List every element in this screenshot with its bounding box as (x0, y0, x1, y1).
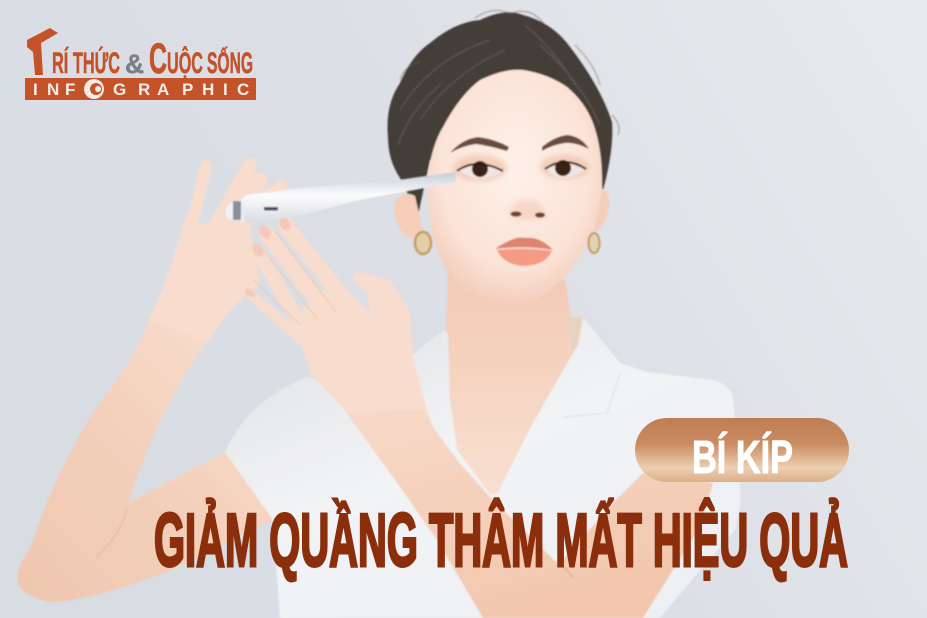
logo text: uộc: UỘC (167, 46, 203, 80)
upper lash (457, 164, 503, 171)
photo: woman with eye massage pen (17, 10, 741, 618)
ears (394, 189, 609, 240)
neck and chest (446, 265, 577, 495)
nose shadow (508, 200, 548, 220)
lips (495, 237, 553, 266)
right ear (594, 189, 609, 232)
left nostril (510, 211, 522, 217)
logo ampersand: & (125, 49, 144, 79)
left ear (394, 194, 425, 240)
left earring (415, 232, 431, 254)
iris (472, 161, 488, 177)
nose (508, 200, 548, 220)
upper lip (495, 237, 553, 250)
logo disc icon (84, 79, 104, 99)
pen brand mark (264, 207, 278, 210)
right eye (540, 155, 590, 179)
eye white (546, 164, 585, 178)
finger nails (243, 215, 293, 299)
hair mass (388, 12, 612, 215)
lower lip (497, 249, 552, 266)
right forearm and upper arm (330, 375, 713, 618)
right earring (588, 233, 600, 253)
face (428, 70, 602, 303)
logo text: Trí thức: RÍ THỨC (52, 46, 120, 80)
right hand (243, 215, 427, 412)
eyeshadow (453, 155, 507, 181)
finger creases (254, 232, 336, 325)
badge (635, 418, 849, 483)
logo: Tri Thuc & Cuoc Song Infographic (25, 28, 256, 100)
elbow crease (97, 510, 127, 557)
lapel crease (563, 373, 620, 417)
iris (555, 160, 571, 176)
logo bar text: INFOGRAPHIC (33, 80, 249, 99)
pen body (239, 172, 456, 223)
logo big C: C (149, 35, 167, 83)
logo bar (25, 78, 256, 100)
right brow (542, 135, 589, 151)
eye massage pen (226, 172, 456, 223)
logo text: sống: SỐNG (207, 46, 253, 80)
hair highlights (398, 25, 600, 145)
white dress (225, 317, 741, 618)
left hand (150, 158, 288, 342)
left eye (453, 155, 507, 181)
right nostril (535, 212, 545, 218)
badge pill (635, 418, 849, 482)
left arm (17, 317, 280, 602)
eyeshadow (540, 155, 590, 179)
left brow (450, 137, 509, 153)
upper lash (545, 162, 586, 169)
collar lining (563, 317, 583, 353)
hair wisps (400, 10, 619, 135)
inner elbow crease (560, 563, 573, 577)
palm (295, 272, 427, 412)
logo T mark (27, 28, 58, 75)
eye white (458, 165, 502, 179)
badge text: BÍ KÍP (692, 431, 793, 483)
fingers (249, 226, 345, 340)
hair (388, 10, 619, 215)
pen cap (226, 199, 244, 222)
pen metal band (233, 201, 241, 220)
